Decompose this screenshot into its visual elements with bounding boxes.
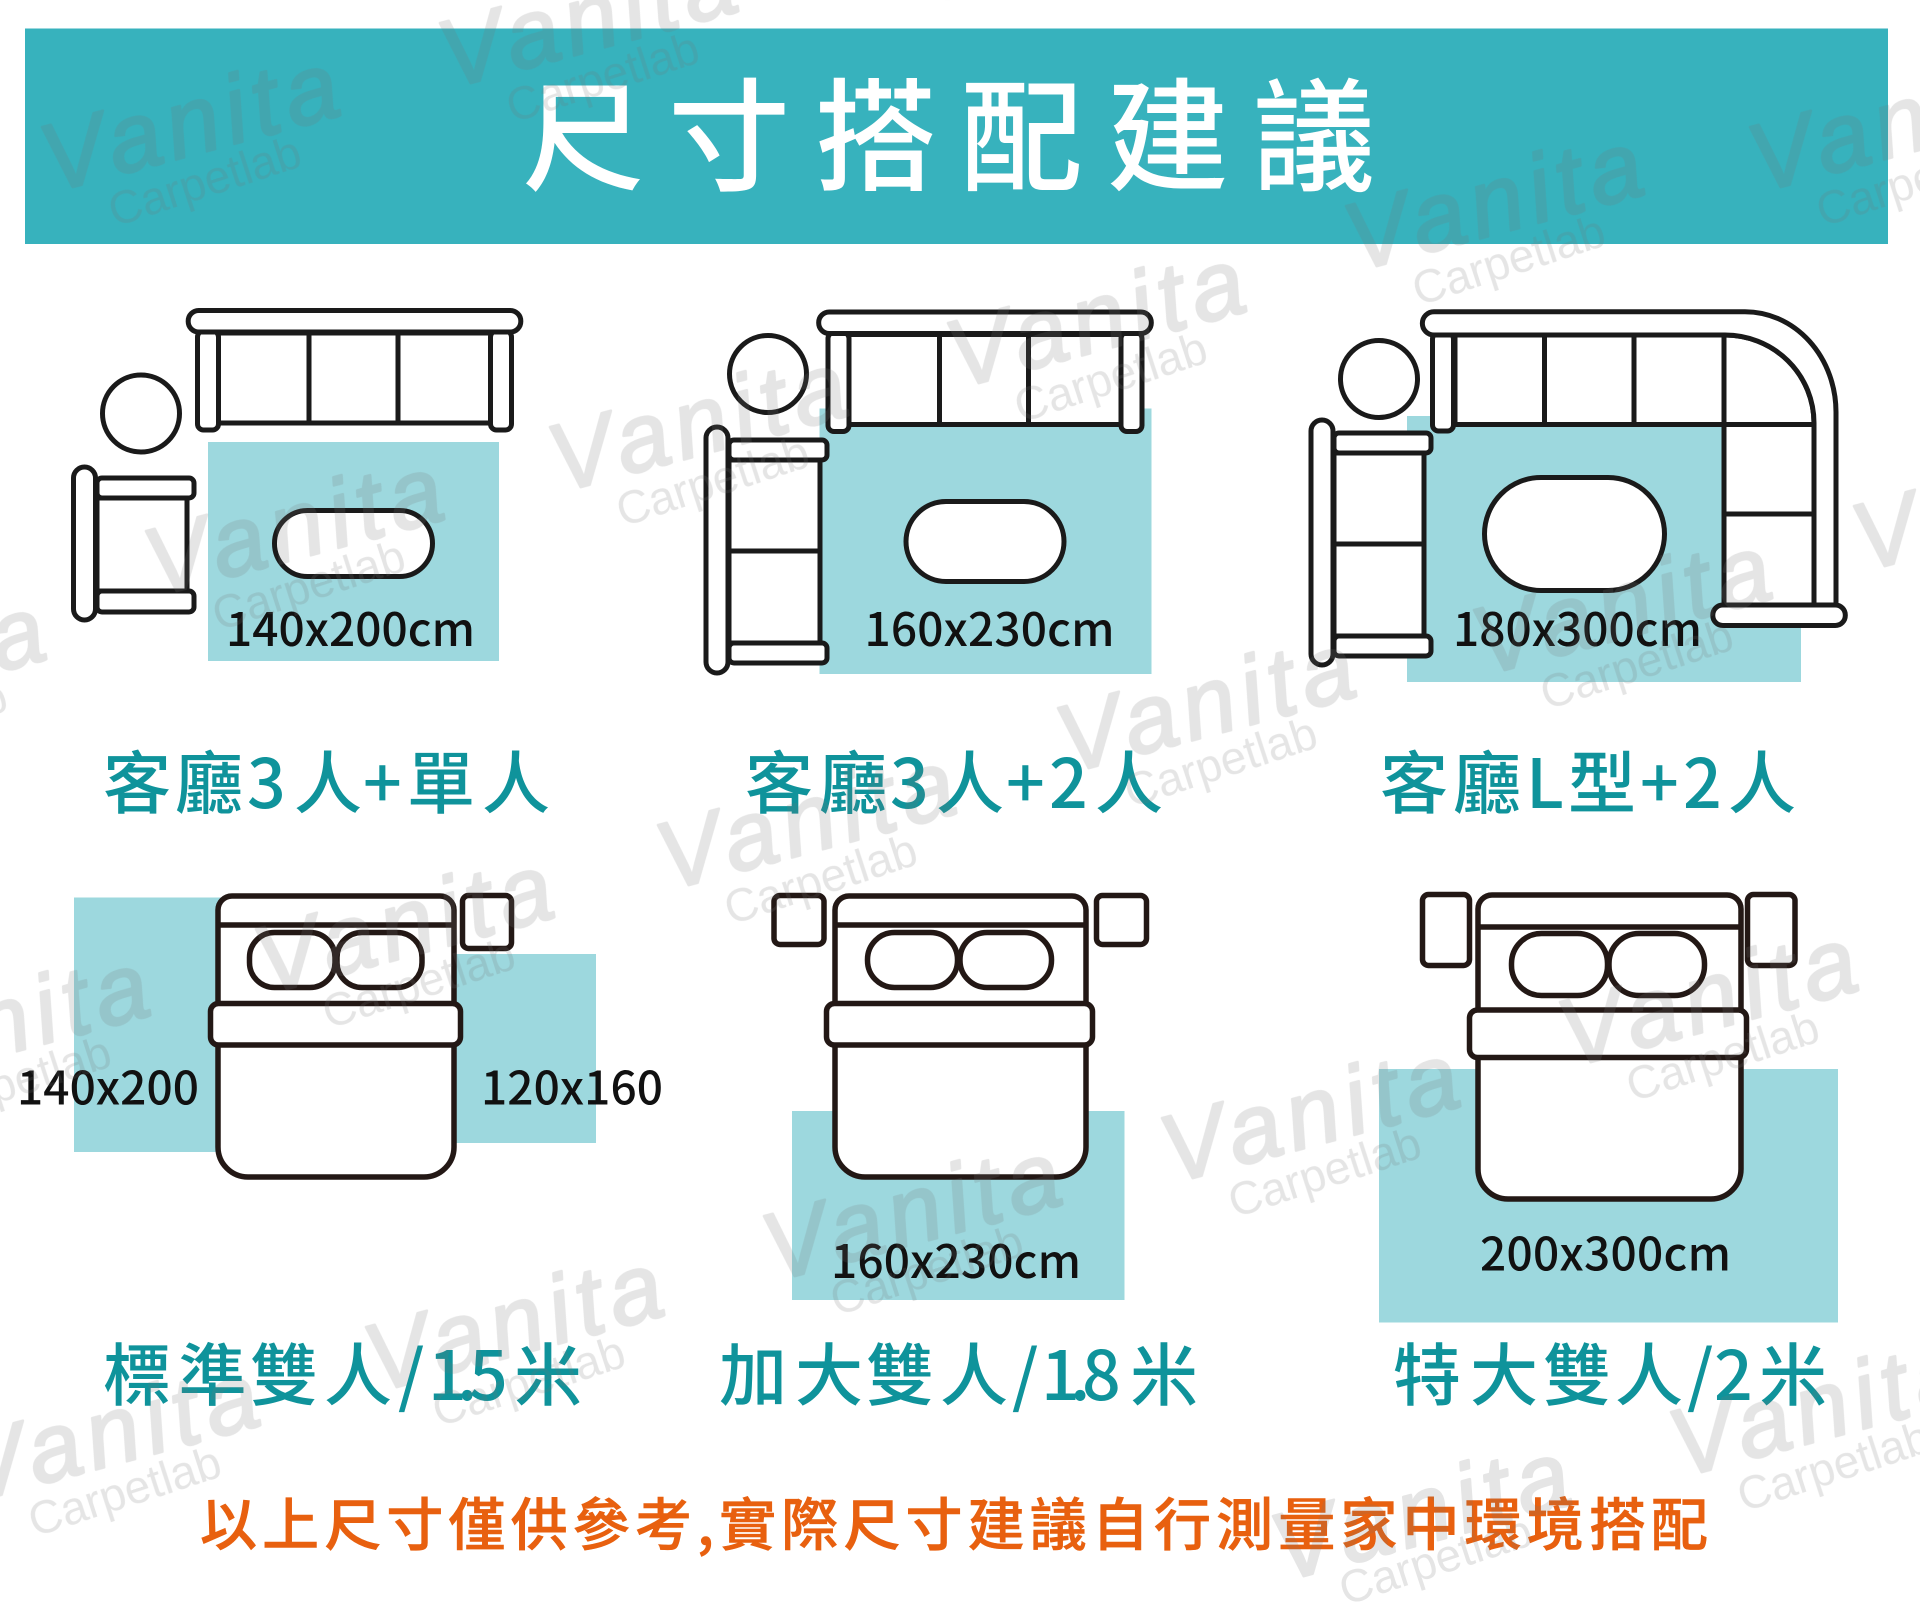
watermark pattern: Vanita	[935, 226, 1262, 409]
watermark pattern: Carpetlab	[426, 1325, 631, 1437]
bed	[1470, 895, 1746, 1199]
side table	[1340, 340, 1418, 418]
watermark pattern: Carpetlab	[1406, 204, 1611, 316]
rug size: 140x200cm	[226, 594, 475, 660]
watermark pattern: Vanita	[133, 434, 460, 617]
watermark pattern: Vanita	[645, 728, 972, 911]
watermark pattern: Vanita	[1461, 513, 1788, 696]
two seat sofa	[1311, 420, 1431, 665]
panel label: 標準雙人/1.5米	[103, 1321, 582, 1420]
panel: queen double bed	[719, 896, 1198, 1420]
panel label: 客廳L型+2人	[1380, 729, 1796, 828]
panel: living room L shape plus 2 seat	[1311, 312, 1845, 828]
bed	[826, 896, 1092, 1177]
rug size: 160x230cm	[864, 594, 1114, 660]
watermark pattern: Vanita	[1149, 1021, 1476, 1204]
right rug size: 120x160	[481, 1052, 663, 1118]
watermark pattern: Carpetlab	[1534, 608, 1739, 720]
panel: standard double bed	[17, 896, 663, 1420]
footer note: 以上尺寸僅供參考,實際尺寸建議自行測量家中環境搭配	[200, 1480, 1708, 1562]
watermark pattern: Vanita	[1333, 109, 1660, 292]
nightstand right	[1096, 896, 1146, 944]
watermark pattern: Carpetlab	[22, 1435, 227, 1547]
watermark pattern: Carpetlab	[206, 529, 411, 641]
rug size: 180x300cm	[1453, 594, 1702, 660]
panel label: 客廳3人+單人	[103, 729, 550, 828]
panel label: 特大雙人/2米	[1393, 1321, 1827, 1420]
side table	[102, 375, 180, 452]
watermark pattern: Vanita	[29, 30, 356, 213]
nightstand	[462, 896, 512, 948]
rug	[1407, 416, 1801, 682]
watermark pattern: Carpetlab	[1118, 706, 1323, 818]
watermark pattern: Carpetlab	[102, 125, 307, 237]
side table	[730, 336, 806, 412]
title banner	[25, 28, 1888, 244]
watermark pattern: Carpetlab	[316, 927, 521, 1039]
watermark pattern: Carpetlab	[1332, 1504, 1538, 1615]
watermark pattern: Carpetlab	[500, 21, 705, 133]
armchair	[74, 467, 194, 620]
coffee table	[274, 510, 432, 576]
rug large	[74, 898, 224, 1152]
watermark pattern: Carpetlab	[1222, 1116, 1427, 1228]
rug	[792, 1111, 1124, 1300]
watermark pattern: Vanita	[1045, 611, 1372, 794]
nightstand left	[1422, 894, 1470, 966]
rug small	[450, 954, 596, 1143]
bed	[210, 896, 460, 1177]
watermark pattern: Carpetlab	[824, 1214, 1029, 1326]
coffee table	[1484, 478, 1664, 590]
three seat sofa	[819, 312, 1151, 432]
three seat sofa	[188, 310, 521, 430]
panel label: 加大雙人/1.8米	[719, 1321, 1198, 1420]
nightstand left	[774, 896, 824, 944]
watermark pattern: Carpetlab	[1008, 321, 1213, 433]
title: 尺寸搭配建議	[522, 40, 1375, 217]
panel: king double bed	[1379, 894, 1838, 1420]
L shape sofa	[1422, 312, 1845, 626]
watermark pattern: Vanita	[751, 1119, 1078, 1302]
watermark pattern: Vanita	[243, 832, 570, 1015]
panel: living room 3 seat plus single	[74, 310, 550, 828]
rug size: 200x300cm	[1480, 1218, 1731, 1284]
rug	[820, 408, 1152, 674]
watermark pattern: Vanita	[537, 330, 864, 513]
watermark pattern: Carpetlab	[610, 425, 815, 537]
nightstand right	[1748, 894, 1795, 966]
watermark pattern: Carpetlab	[1620, 1000, 1825, 1112]
rug	[208, 442, 499, 661]
rug size: 160x230cm	[831, 1226, 1081, 1292]
watermark pattern: Vanita	[353, 1230, 680, 1413]
panel: living room 3 seat plus 2 seat	[706, 312, 1163, 828]
left rug size: 140x200	[17, 1052, 199, 1118]
watermark pattern: Vanita	[1547, 905, 1874, 1088]
rug	[1379, 1069, 1838, 1322]
two seat sofa	[706, 427, 827, 673]
panel label: 客廳3人+2人	[745, 729, 1163, 828]
watermark pattern: Carpetlab	[718, 823, 923, 935]
watermark pattern: Vanita	[1260, 1419, 1587, 1602]
coffee table	[906, 502, 1064, 582]
